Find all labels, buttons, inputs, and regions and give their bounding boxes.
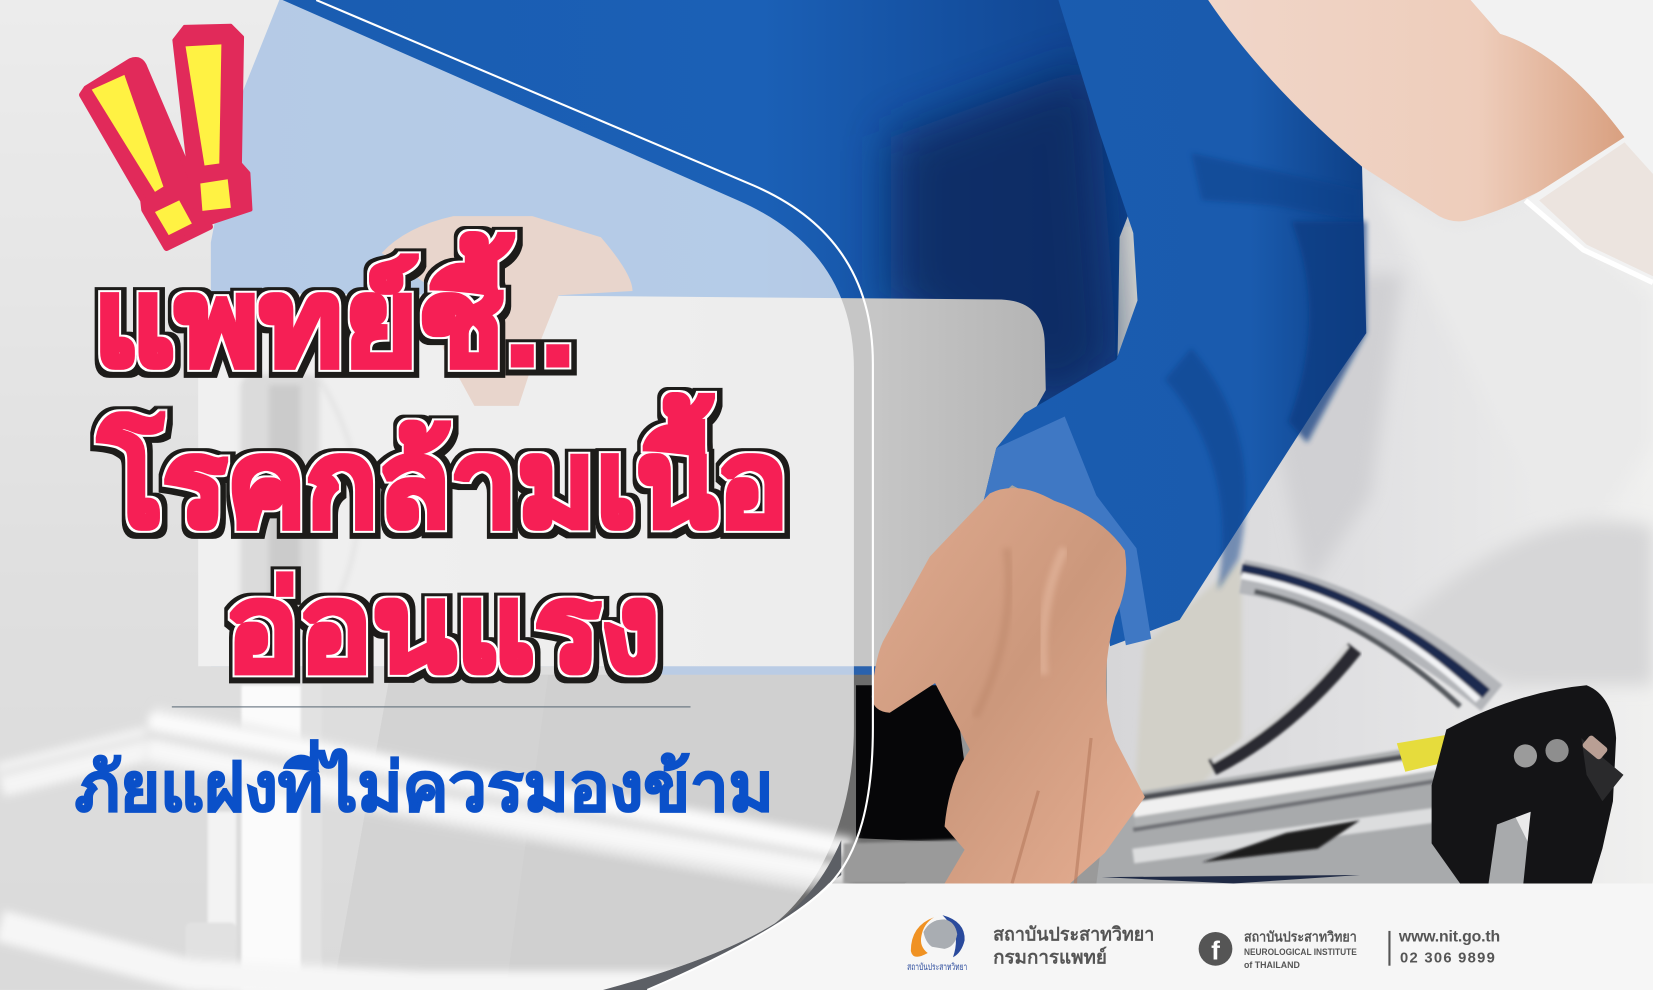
right forearm <box>1208 0 1625 221</box>
panel white outline <box>316 0 873 990</box>
footer band <box>649 883 1653 990</box>
left tube and rail <box>0 720 850 987</box>
title line 3: อ่อนแรง <box>226 560 660 697</box>
seat bracket <box>240 374 359 627</box>
institute name: สถาบันประสาทวิทยา <box>993 924 1154 945</box>
chrome base by hand <box>843 833 1160 883</box>
icon: double exclamation marks <box>82 25 251 248</box>
facebook page name: of THAILAND <box>1244 960 1300 970</box>
front hand <box>872 488 1145 883</box>
institute name: กรมการแพทย์ <box>993 947 1107 969</box>
divider line <box>172 706 691 707</box>
black clamp <box>1432 685 1616 883</box>
upper walker tube <box>1242 569 1492 706</box>
back hand <box>382 216 633 406</box>
facebook page name <box>1244 929 1357 970</box>
icon: facebook <box>1199 932 1232 966</box>
title line 2: โรคกล้ามเนื้อ <box>98 394 789 552</box>
blue sleeve <box>980 0 1366 646</box>
institute name <box>993 924 1154 969</box>
website and phone: www.nit.go.th <box>1398 928 1500 945</box>
logo: สถาบันประสาทวิทยา <box>907 962 967 973</box>
white sleeve <box>1471 0 1653 283</box>
walker strut <box>1212 645 1355 768</box>
pale seat corner under arm <box>1133 559 1242 812</box>
black seat shadow <box>856 685 975 843</box>
facebook page name: NEUROLOGICAL INSTITUTE <box>1244 947 1357 957</box>
chrome strip between panel and outline <box>603 840 841 990</box>
facebook page name: สถาบันประสาทวิทยา <box>1244 929 1357 944</box>
white stand <box>186 685 322 990</box>
trousers <box>333 675 949 990</box>
main walker tube <box>1133 744 1486 856</box>
website and phone: 02 306 9899 <box>1400 951 1495 967</box>
yellow tape <box>1397 729 1491 772</box>
translucent white panel <box>0 0 854 990</box>
title line 1: แพทย์ชี้.. <box>93 233 576 391</box>
icon: facebook: f <box>1211 935 1220 965</box>
blue strip under seat <box>654 664 970 687</box>
logo <box>907 915 967 973</box>
subtitle: ภัยแฝงที่ไม่ควรมองข้าม <box>75 740 774 826</box>
white coat <box>1107 0 1653 990</box>
exclamation left <box>82 60 210 248</box>
seat back <box>198 293 1046 666</box>
torso in blue shirt <box>211 0 1212 666</box>
cuff <box>980 416 1151 645</box>
torso shadow <box>891 63 1117 411</box>
footer contact block <box>907 915 1500 973</box>
website and phone <box>1398 928 1500 967</box>
exclamation right <box>174 25 251 224</box>
